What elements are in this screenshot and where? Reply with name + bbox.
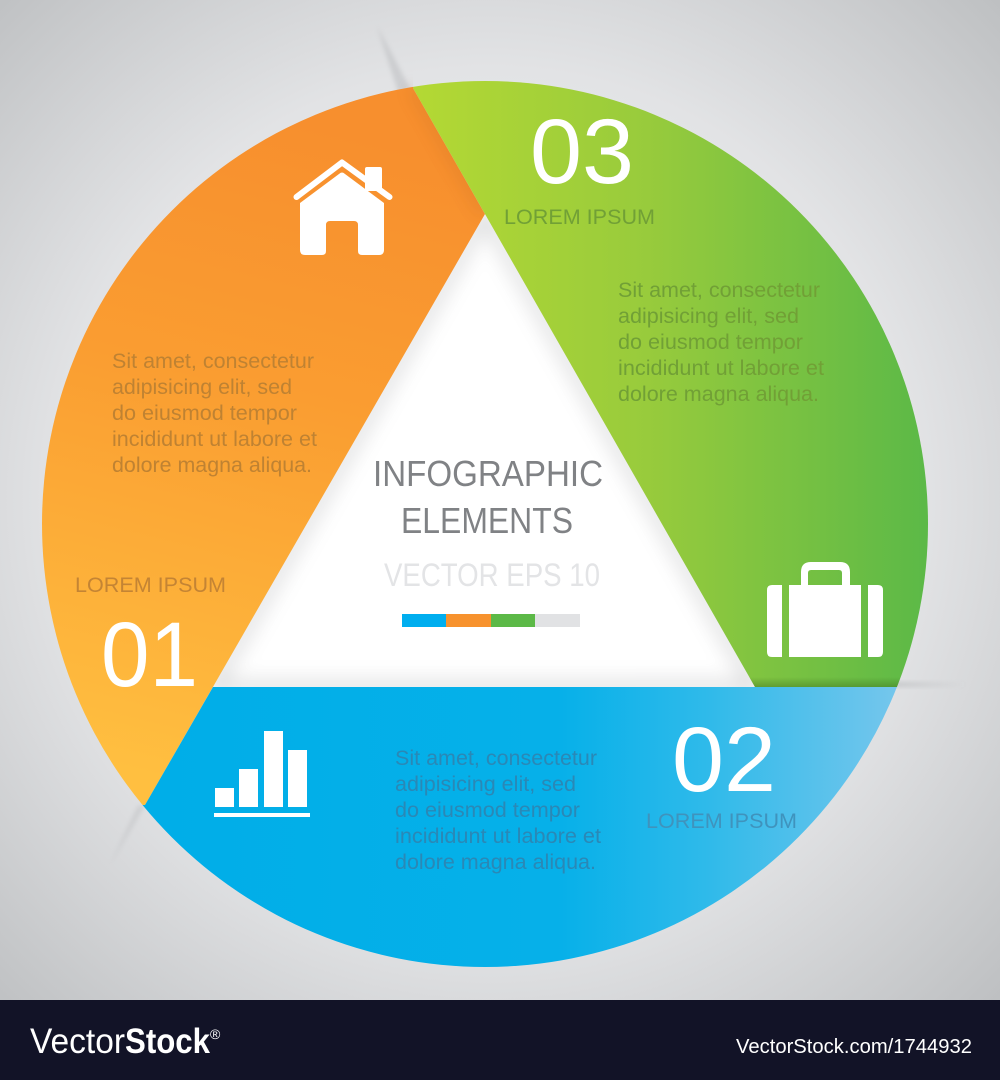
text block: do eiusmod tempor <box>112 401 297 425</box>
number: 02 <box>672 709 776 811</box>
text block: Sit amet, consectetur <box>618 278 820 302</box>
text block: Sit amet, consectetur <box>395 746 597 770</box>
text block: do eiusmod tempor <box>618 330 803 354</box>
logo <box>30 1022 221 1061</box>
text block: dolore magna aliqua. <box>618 382 819 406</box>
logo: Vector <box>30 1022 125 1061</box>
text block: adipisicing elit, sed <box>618 304 799 328</box>
text block: dolore magna aliqua. <box>112 453 312 477</box>
fold creases outside the circle <box>110 26 965 865</box>
text block <box>112 349 317 477</box>
panel: green segment 03 <box>413 81 928 687</box>
shadow at the blue edge <box>750 678 900 687</box>
footer bar <box>0 1000 1000 1080</box>
url: VectorStock.com/1744932 <box>736 1035 972 1058</box>
text block: incididunt ut labore et <box>395 824 601 848</box>
label: LOREM IPSUM <box>75 573 226 597</box>
panel: orange segment 01 <box>42 85 485 805</box>
text block: Sit amet, consectetur <box>112 349 314 373</box>
panel: blue segment 02 <box>142 687 897 967</box>
icon: house <box>296 162 390 255</box>
logo: Stock <box>125 1022 210 1061</box>
centre triangle <box>233 242 735 683</box>
number: 01 <box>101 604 198 706</box>
icon: briefcase <box>767 562 883 657</box>
text block: do eiusmod tempor <box>395 798 580 822</box>
text block <box>395 746 601 874</box>
text block: adipisicing elit, sed <box>395 772 576 796</box>
text block: adipisicing elit, sed <box>112 375 292 399</box>
logo: ® <box>210 1026 221 1042</box>
subtitle: VECTOR EPS 10 <box>384 557 600 593</box>
icon: bar chart <box>214 731 310 817</box>
colour legend bar <box>402 614 580 627</box>
title: INFOGRAPHIC <box>373 453 603 494</box>
text block <box>618 278 824 406</box>
number: 03 <box>530 101 634 203</box>
label: LOREM IPSUM <box>646 809 797 833</box>
text block: incididunt ut labore et <box>112 427 317 451</box>
title: ELEMENTS <box>401 500 573 541</box>
text block: dolore magna aliqua. <box>395 850 596 874</box>
text block: incididunt ut labore et <box>618 356 824 380</box>
title <box>373 453 603 541</box>
label: LOREM IPSUM <box>504 205 655 229</box>
